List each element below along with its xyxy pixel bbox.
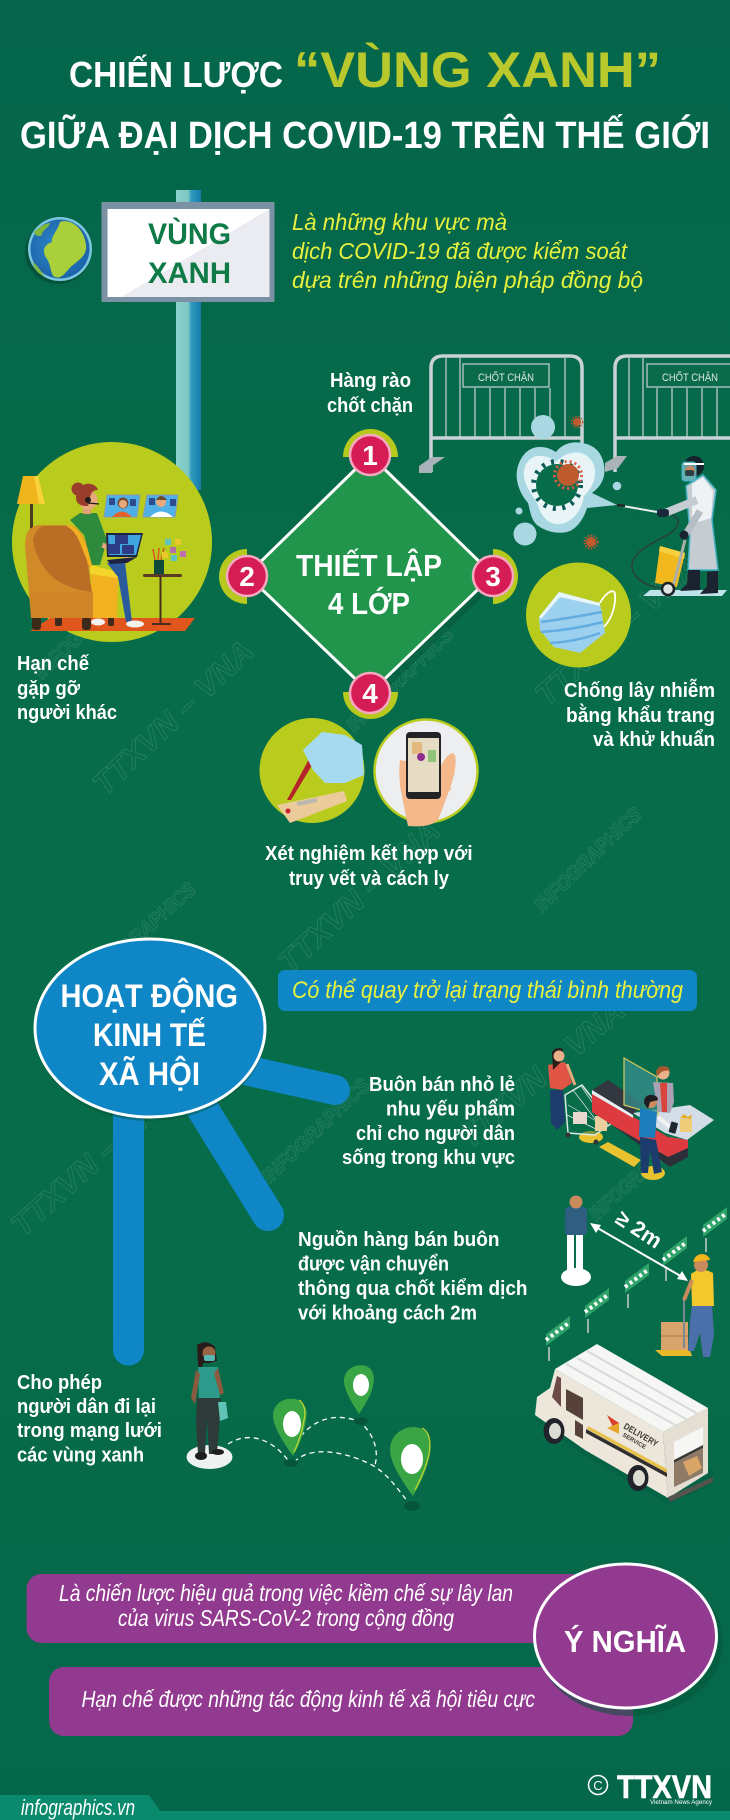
icon: location pins <box>273 1365 431 1511</box>
label: Nguồn hàng bán buôn: được vận chuyển <box>298 1254 449 1276</box>
label: Nguồn hàng bán buôn: thông qua chốt kiểm dịch <box>298 1278 528 1300</box>
standing man <box>561 1196 591 1286</box>
icon: laptop <box>106 533 143 564</box>
badge 1: 1 <box>362 440 378 471</box>
definition text: Là những khu vực mà <box>292 209 507 235</box>
arrow: ≥ 2m <box>611 1205 667 1253</box>
label: Hạn chế gặp gỡ người khác: người khác <box>17 702 117 724</box>
barriers <box>546 1207 727 1361</box>
badge 4: 4 <box>362 678 378 709</box>
icon: delivery van <box>535 1344 713 1505</box>
label: Nguồn hàng bán buôn <box>298 1229 528 1324</box>
label: Nguồn hàng bán buôn: với khoảng cách 2m <box>298 1302 477 1324</box>
badge 2: 2 <box>239 561 255 592</box>
panel: meaning bar 1 <box>26 1574 586 1643</box>
blue connector arms <box>128 1060 335 1350</box>
arrow <box>590 1205 688 1281</box>
sign board <box>102 202 274 302</box>
label: Buôn bán nhỏ lẻ: nhu yếu phẩm <box>386 1098 515 1120</box>
ellipse: Hoạt động kinh tế xã hội: HOẠT ĐỘNG <box>60 978 238 1014</box>
icon: barrier fences <box>419 356 730 473</box>
label: Hạn chế gặp gỡ người khác: gặp gỡ <box>17 678 81 700</box>
icon: globe <box>25 217 92 284</box>
ellipse: Hoạt động kinh tế xã hội: XÃ HỘI <box>99 1056 200 1092</box>
ellipse: Hoạt động kinh tế xã hội: KINH TẾ <box>93 1017 206 1053</box>
watermarks: TTXVN – VNA <box>4 1078 182 1243</box>
icon: disinfection worker <box>617 456 727 596</box>
panel: meaning bar 1: Là chiến lược hiệu quả trong việc kiềm chế sự lây lan <box>59 1580 513 1606</box>
label: Chống lây nhiễm: Chống lây nhiễm <box>564 678 715 702</box>
label: Cho phép người dân đi lại <box>17 1372 162 1466</box>
footer strip: infographics.vn <box>21 1795 135 1820</box>
icon: checkout counter scene <box>548 1048 714 1180</box>
footer strip <box>0 1795 730 1820</box>
badge 1 <box>343 429 398 475</box>
circle: Ý nghĩa <box>534 1564 723 1716</box>
circle: working from home <box>12 442 212 642</box>
diamond: Thiết lập 4 lớp: 4 LỚP <box>328 585 410 621</box>
badge 3: 3 <box>485 561 501 592</box>
dashed route lines <box>228 1417 412 1506</box>
icon: signpost pole <box>176 190 201 490</box>
watermarks: TTXVN – VNA <box>528 547 706 712</box>
icon: delivery van: SERVICE <box>621 1433 647 1451</box>
watermarks: INFOGRAPHICS <box>530 803 647 917</box>
logo: TTXVN: C <box>593 1778 603 1793</box>
diamond: Thiết lập 4 lớp <box>247 455 499 699</box>
panel: meaning bar 2: Hạn chế được những tác động kinh tế xã hội tiêu cực <box>82 1686 535 1712</box>
watermarks: INFOGRAPHICS <box>258 1074 375 1188</box>
delivery man <box>655 1254 714 1357</box>
definition text: dịch COVID-19 đã được kiểm soát <box>292 238 629 264</box>
logo: TTXVN: TTXVN <box>617 1769 712 1805</box>
definition text: dựa trên những biện pháp đồng bộ <box>292 267 643 293</box>
watermarks: INFOGRAPHICS <box>30 570 147 684</box>
label: Buôn bán nhỏ lẻ: sống trong khu vực <box>342 1147 515 1169</box>
title: CHIẾN LƯỢC <box>69 54 283 95</box>
icon: video call windows <box>104 495 178 517</box>
icon: delivery van: DELIVERY <box>622 1421 660 1449</box>
icon: person on headset <box>70 482 144 628</box>
label: Hạn chế gặp gỡ người khác: Hạn chế <box>17 653 90 675</box>
circle: Ý nghĩa: Ý NGHĨA <box>564 1624 686 1659</box>
diamond: Thiết lập 4 lớp: THIẾT LẬP <box>296 547 442 583</box>
watermarks: TTXVN – VNA <box>452 992 632 1155</box>
label: Cho phép người dân đi lại: trong mạng lưới <box>17 1420 162 1442</box>
panel: meaning bar 1: của virus SARS-CoV-2 trong cộng đồng <box>118 1605 454 1631</box>
label: Xét nghiệm: truy vết và cách ly <box>289 868 450 890</box>
icon: two-metre distance scene <box>546 1196 727 1361</box>
label: Xét nghiệm <box>265 843 472 890</box>
label: Buôn bán nhỏ lẻ: chỉ cho người dân <box>356 1123 515 1145</box>
watermarks: INFOGRAPHICS <box>82 878 201 989</box>
logo: TTXVN <box>588 1769 712 1806</box>
watermarks <box>4 547 706 1243</box>
watermarks: INFOGRAPHICS <box>585 1125 693 1226</box>
label: Chống lây nhiễm: và khử khuẩn <box>593 729 715 751</box>
label: Hàng rào chốt chặn: Hàng rào <box>330 370 411 392</box>
icon: virus cloud <box>514 415 621 548</box>
icon: barrier fences: CHỐT CHẶN <box>478 370 534 384</box>
badge 2 <box>219 549 267 604</box>
title <box>20 42 710 157</box>
label: Buôn bán nhỏ lẻ <box>342 1074 515 1169</box>
icon: phone tracing <box>374 720 478 826</box>
icon: test kit <box>260 718 364 823</box>
ellipse: Hoạt động kinh tế xã hội <box>34 939 266 1121</box>
sign board: VÙNG <box>148 217 231 251</box>
label: Chống lây nhiễm: bằng khẩu trang <box>566 703 715 727</box>
banner: normal state: Có thể quay trở lại trạng thái bình thường <box>292 977 684 1004</box>
badge 3 <box>473 549 518 604</box>
icon: walking woman <box>186 1342 232 1469</box>
watermarks: TTXVN – VNA <box>86 633 260 802</box>
label: Hàng rào chốt chặn: chốt chặn <box>327 395 413 417</box>
label: Buôn bán nhỏ lẻ: Buôn bán nhỏ lẻ <box>369 1074 515 1096</box>
title: “VÙNG XANH” <box>294 42 661 98</box>
icon: armchair <box>25 525 195 631</box>
label: Hàng rào chốt chặn <box>327 370 413 417</box>
badge 4 <box>343 673 398 719</box>
label: Nguồn hàng bán buôn: Nguồn hàng bán buôn <box>298 1229 500 1251</box>
sign board: XANH <box>148 257 231 290</box>
label: Cho phép người dân đi lại: các vùng xanh <box>17 1444 144 1466</box>
label: Hạn chế gặp gỡ người khác <box>17 653 117 724</box>
label: Cho phép người dân đi lại: người dân đi lại <box>17 1396 156 1418</box>
icon: barrier fences: CHỐT CHẶN <box>662 370 718 384</box>
icon: side table <box>143 539 186 625</box>
label: Cho phép người dân đi lại: Cho phép <box>17 1372 102 1394</box>
watermarks: INFOGRAPHICS <box>342 623 459 737</box>
watermarks: TTXVN – VNA <box>271 813 447 980</box>
panel: meaning bar 2 <box>49 1667 633 1736</box>
definition text <box>292 209 643 293</box>
banner: normal state <box>278 970 697 1011</box>
icon: lamp <box>17 476 45 530</box>
label: Xét nghiệm: Xét nghiệm kết hợp với <box>265 843 472 865</box>
icon: face mask <box>526 562 631 668</box>
label: Chống lây nhiễm <box>564 678 715 751</box>
logo: TTXVN: Vietnam News Agency <box>650 1800 712 1806</box>
